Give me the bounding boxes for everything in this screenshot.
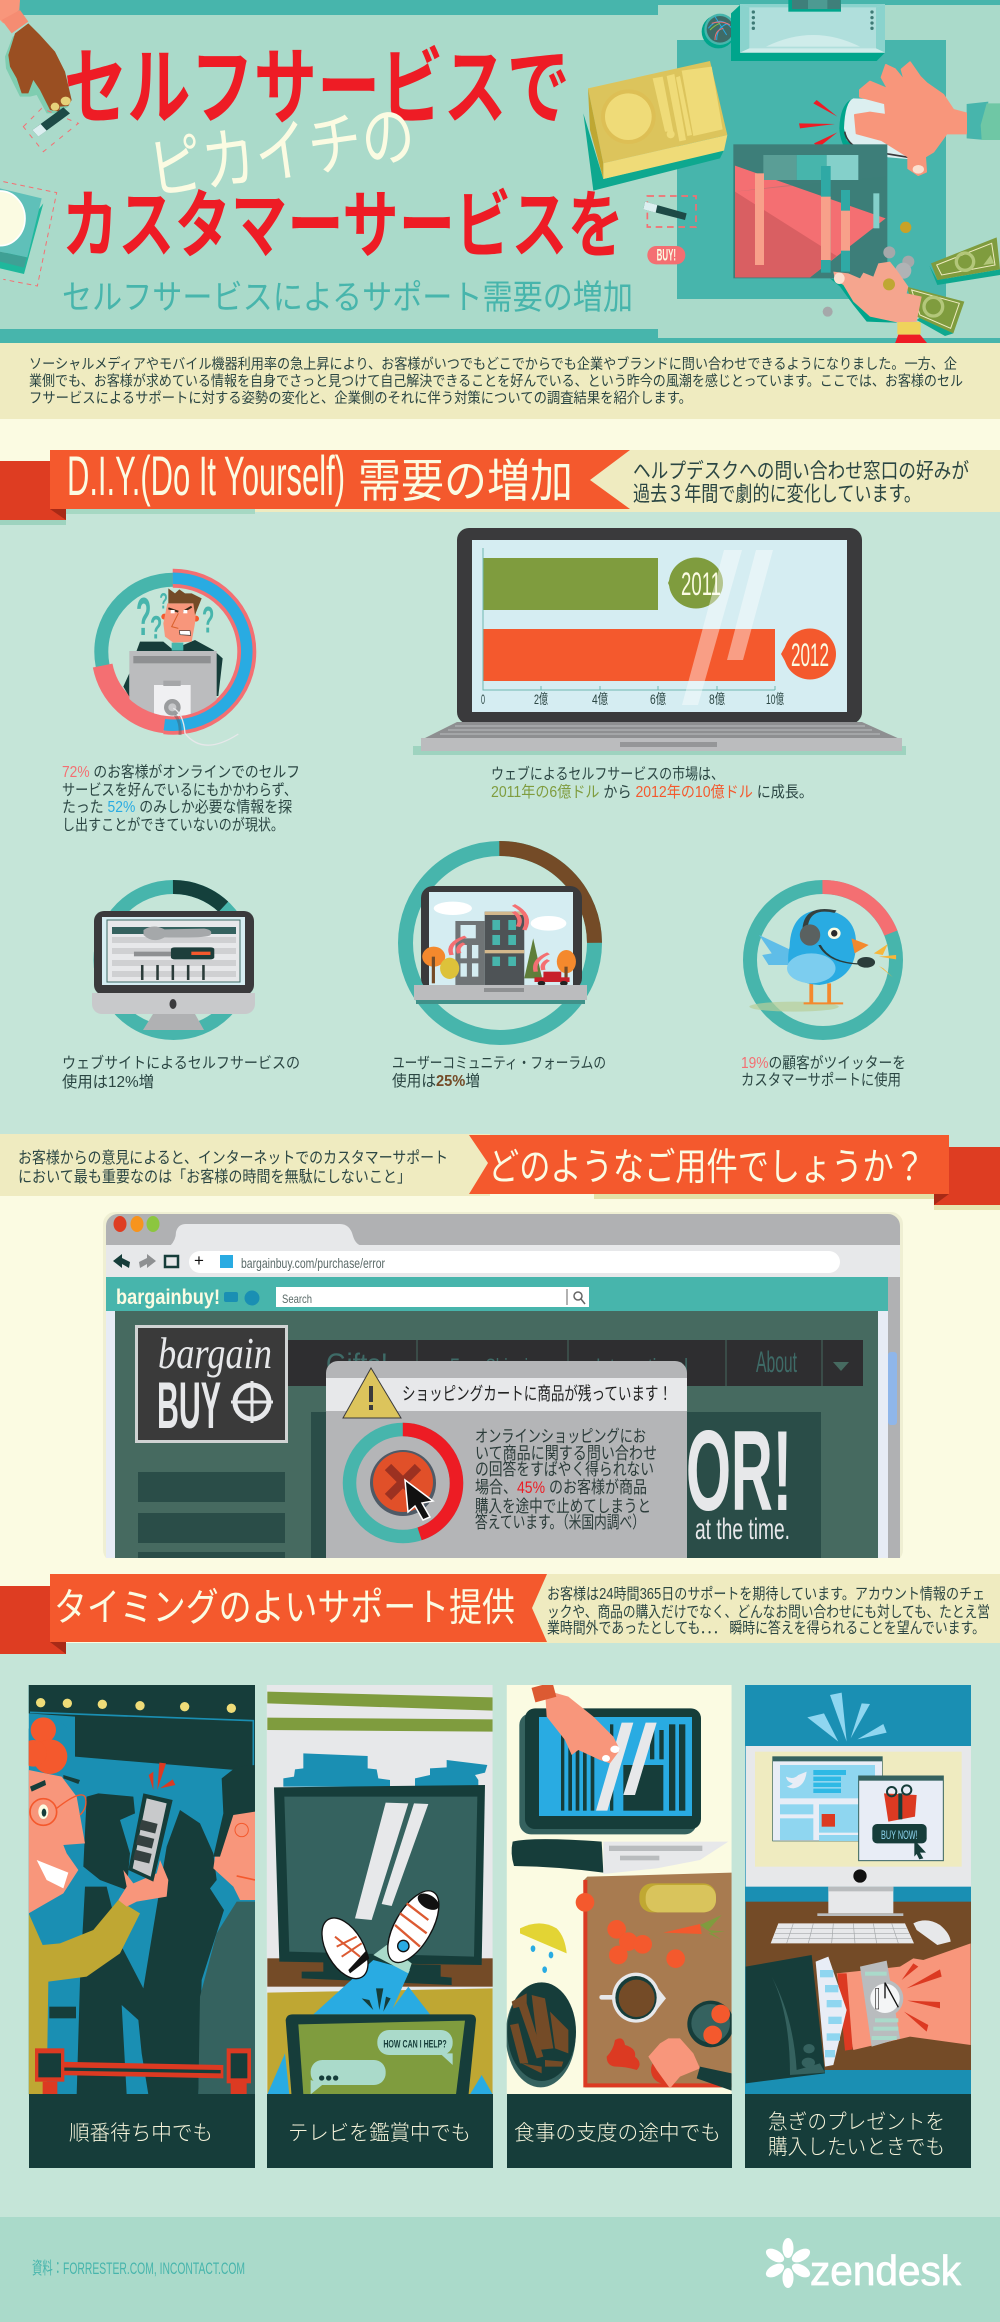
icon: question marks <box>136 586 214 647</box>
illustration: kitchen top view <box>506 1682 734 2094</box>
caption: 25%: 使用は25%増 <box>392 1072 480 1090</box>
icon: question marks: ? <box>136 586 151 647</box>
caption: 72%: サービスを好んでいるにもかかわらず、 <box>62 781 297 799</box>
popup: cart warning: オンラインショッピングにお <box>475 1427 646 1446</box>
label: 2011 <box>668 558 723 608</box>
caption: 12% <box>62 1053 300 1091</box>
caption: market growth <box>491 764 813 801</box>
site toolbar <box>106 1277 888 1311</box>
icon: wifi signals <box>450 905 549 972</box>
icon: buy badge <box>647 246 685 265</box>
caption: 72%: 72% のお客様がオンラインでのセルフ <box>62 763 300 781</box>
illustration: desk with watch <box>745 1685 971 2094</box>
chart: donut 19% with bird <box>749 887 896 1033</box>
caption: 19% <box>741 1054 906 1089</box>
section heading: どのようなご用件でしょうか <box>0 1134 1000 1210</box>
website page: About <box>756 1346 797 1379</box>
panel: card waiting in line <box>20 1685 255 2168</box>
panel: footer <box>0 2217 1000 2322</box>
panel: card buying gift: 購入したいときでも <box>768 2136 945 2159</box>
icon: scanner <box>731 0 885 61</box>
browser chrome: + <box>194 1251 204 1270</box>
chart: donut 25% with community laptop <box>406 848 594 1038</box>
section heading: タイミングのよいサポート提供 <box>0 1574 1000 1693</box>
section heading: D.I.Y.: 需要の増加 <box>358 455 573 507</box>
caption: 72% <box>62 763 300 834</box>
icon: hand on mouse <box>799 62 1000 175</box>
icon: buy badge: BUY! <box>657 246 676 265</box>
website page: Free Shipping <box>450 1354 545 1379</box>
error panel: at the time. <box>695 1513 790 1546</box>
popup: cart warning <box>326 1361 687 1562</box>
bar chart: 4億 <box>592 691 608 707</box>
logo: zendesk: zendesk <box>810 2247 962 2294</box>
website page <box>115 1311 878 1562</box>
bar chart <box>481 548 836 707</box>
icon: gum <box>643 196 696 227</box>
browser chrome: bargainbuy.com/purchase/error <box>241 1255 385 1271</box>
browser window: buy now: BUY NOW! <box>881 1828 918 1842</box>
bar chart: 2億 <box>534 691 548 707</box>
panel: card waiting in line: 順番待ち中でも <box>69 2122 213 2145</box>
popup: cart warning: ショッピングカートに商品が残っています！ <box>402 1384 672 1404</box>
teal background panel <box>677 40 946 299</box>
site toolbar: Search <box>282 1292 312 1306</box>
illustration: television and shoes <box>267 1685 493 2097</box>
icon: question marks: ? <box>159 588 168 613</box>
section heading: どのようなご用件でしょうか: お客様からの意見によると、インターネットでのカスタマーサポート <box>18 1149 448 1167</box>
icon: hand holding gum <box>0 0 78 152</box>
label: 2011: 2011 <box>681 566 721 602</box>
chat bubble: dots <box>311 2060 386 2094</box>
title line 3: カスタマーサービスを <box>62 166 624 273</box>
caption: 72%: たった 52% のみしか必要な情報を探 <box>62 798 292 816</box>
popup: cart warning: いて商品に関する問い合わせ <box>475 1444 657 1463</box>
caption: market growth: 2011年の6億ドル から 2012年の10億ドル に成長。 <box>491 783 813 801</box>
logo: bargain buy: bargain <box>158 1329 272 1378</box>
browser window: buy now <box>859 1776 943 1861</box>
section heading: どのようなご用件でしょうか: において最も重要なのは「お客様の時間を無駄にしないこと」 <box>18 1168 411 1186</box>
bar chart: 8億 <box>709 691 725 707</box>
section heading: D.I.Y. <box>0 444 1000 525</box>
icon: tools <box>134 926 214 980</box>
icon: cursor <box>405 1480 433 1520</box>
panel: card cooking: 食事の支度の途中でも <box>514 2122 721 2145</box>
source credit: 資料：FORRESTER.COM, INCONTACT.COM <box>32 2259 245 2278</box>
chart: donut 45% <box>350 1430 456 1536</box>
caption: 12%: 使用は12%増 <box>62 1073 154 1091</box>
chat bubble: how can I help: HOW CAN I HELP? <box>383 2039 447 2051</box>
icon: coins and bills <box>823 222 1000 336</box>
label: 2012 <box>781 628 836 680</box>
caption: 19%: カスタマーサポートに使用 <box>741 1071 901 1089</box>
right header illustrations <box>583 0 1000 343</box>
left header illustrations <box>0 0 78 286</box>
panel: browser window <box>103 1212 903 1562</box>
caption: 72%: し出すことができていないのが現状。 <box>62 816 284 834</box>
panel: card watching TV: テレビを鑑賞中でも <box>288 2122 471 2145</box>
section heading: D.I.Y.: 過去３年間で劇的に変化しています。 <box>633 483 921 506</box>
icon: buildings <box>455 912 524 985</box>
icon: man <box>123 588 238 745</box>
panel: card buying gift: 急ぎのプレゼントを <box>768 2111 945 2134</box>
icon: warning triangle <box>343 1368 401 1418</box>
icon: laptop with bar chart <box>413 528 906 755</box>
panel: card buying gift <box>745 1685 971 2168</box>
icon: dark tablet <box>733 144 887 278</box>
caption: market growth: ウェブによるセルフサービスの市場は、 <box>491 764 724 783</box>
caption: 25%: ユーザーコミュニティ・フォーラムの <box>392 1054 606 1072</box>
error panel: OR! <box>686 1408 792 1535</box>
chat bubble: how can I help <box>377 2030 453 2065</box>
caption: 19%: 19%の顧客がツイッターを <box>741 1054 906 1072</box>
chart: donut 72% and 52% with confused man <box>100 578 247 745</box>
icon: trees and car <box>422 938 576 986</box>
icon: compass <box>702 14 736 48</box>
popup: cart warning: の回答をすばやく得られない <box>475 1459 654 1479</box>
icon: plate <box>0 182 57 286</box>
logo: zendesk <box>764 2238 962 2294</box>
panel: card watching TV <box>267 1685 493 2168</box>
subtitle: セルフサービスによるサポート需要の増加 <box>62 270 633 319</box>
icon: gold book <box>583 61 727 191</box>
label: 2012: 2012 <box>791 637 829 673</box>
icon: question marks: ? <box>202 600 214 641</box>
website page: International <box>596 1354 688 1379</box>
title line 1: セルフサービスで <box>64 21 570 142</box>
logo: bargain buy: BUY <box>157 1368 221 1442</box>
bar chart: 6億 <box>650 691 666 707</box>
popup: cart warning: 購入を途中で止めてしまうと <box>475 1497 651 1516</box>
caption: 12%: ウェブサイトによるセルフサービスの <box>62 1053 300 1072</box>
bar chart: 10億 <box>766 691 784 707</box>
title line 2: ピカイチの <box>141 79 421 214</box>
chart: donut 12% with iMac <box>92 887 255 1033</box>
panel: intro text <box>0 343 1000 419</box>
site toolbar: bargainbuy! <box>116 1286 220 1309</box>
error panel <box>311 1408 821 1562</box>
popup: cart warning: 答えています。（米国内調べ） <box>475 1512 645 1532</box>
popup: cart warning: 場合、45% のお客様が商品 <box>475 1478 647 1497</box>
icon: open hand with coins <box>830 262 927 343</box>
website page: Gifts! <box>326 1348 388 1381</box>
icon: question marks: ? <box>150 609 162 646</box>
section heading: タイミングのよいサポート提供: タイミングのよいサポート提供 <box>54 1587 515 1630</box>
logo: bargain buy <box>136 1326 286 1442</box>
illustration: queue <box>20 1685 255 2097</box>
browser window: twitter <box>773 1757 882 1841</box>
panel: header <box>0 0 1000 343</box>
browser chrome <box>106 1214 900 1277</box>
icon: twitter bird <box>749 910 896 1012</box>
caption: 25% <box>392 1054 606 1090</box>
panel: card cooking <box>506 1682 734 2168</box>
section heading: D.I.Y.: D.I.Y.(Do It Yourself) <box>67 444 345 507</box>
bar chart: 0 <box>481 691 485 707</box>
panel: intro text: フサービスによるサポートに対する姿勢の変化と、企業側のそれに伴う対策についての調査結果を紹介します。 <box>29 390 692 407</box>
